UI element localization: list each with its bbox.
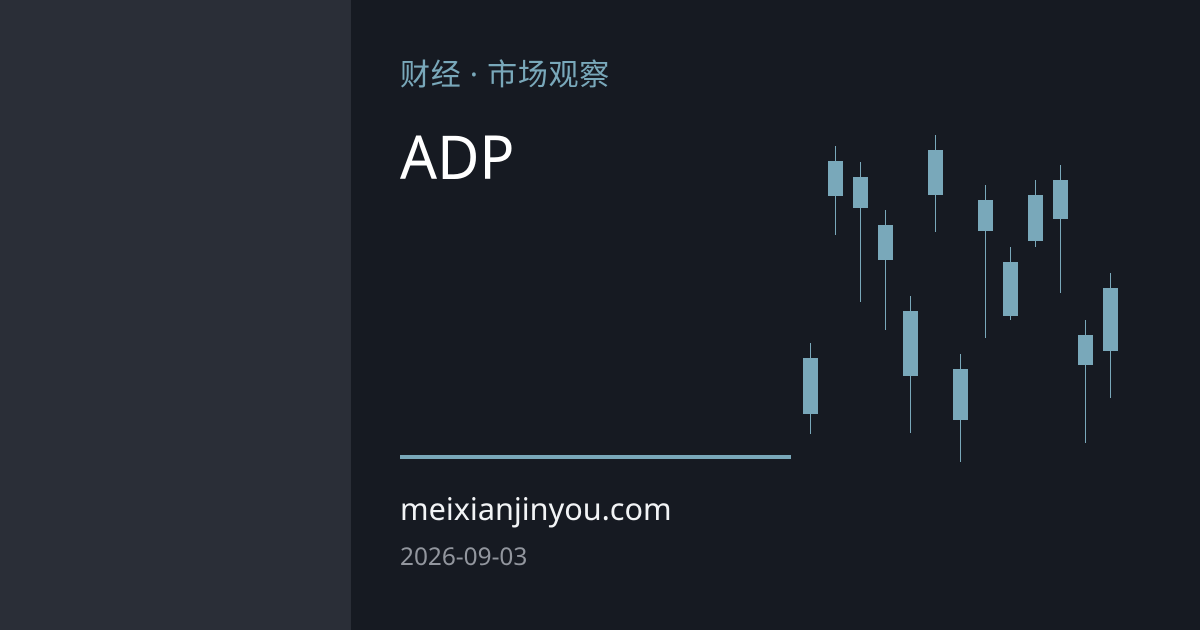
panel: left sidebar [0,0,351,630]
accent rule [400,455,791,459]
site domain: meixianjinyou.com [400,487,672,529]
title: ticker: ADP [400,115,515,197]
category heading: 财经 · 市场观察 [400,53,610,94]
date: 2026-09-03 [400,540,527,573]
